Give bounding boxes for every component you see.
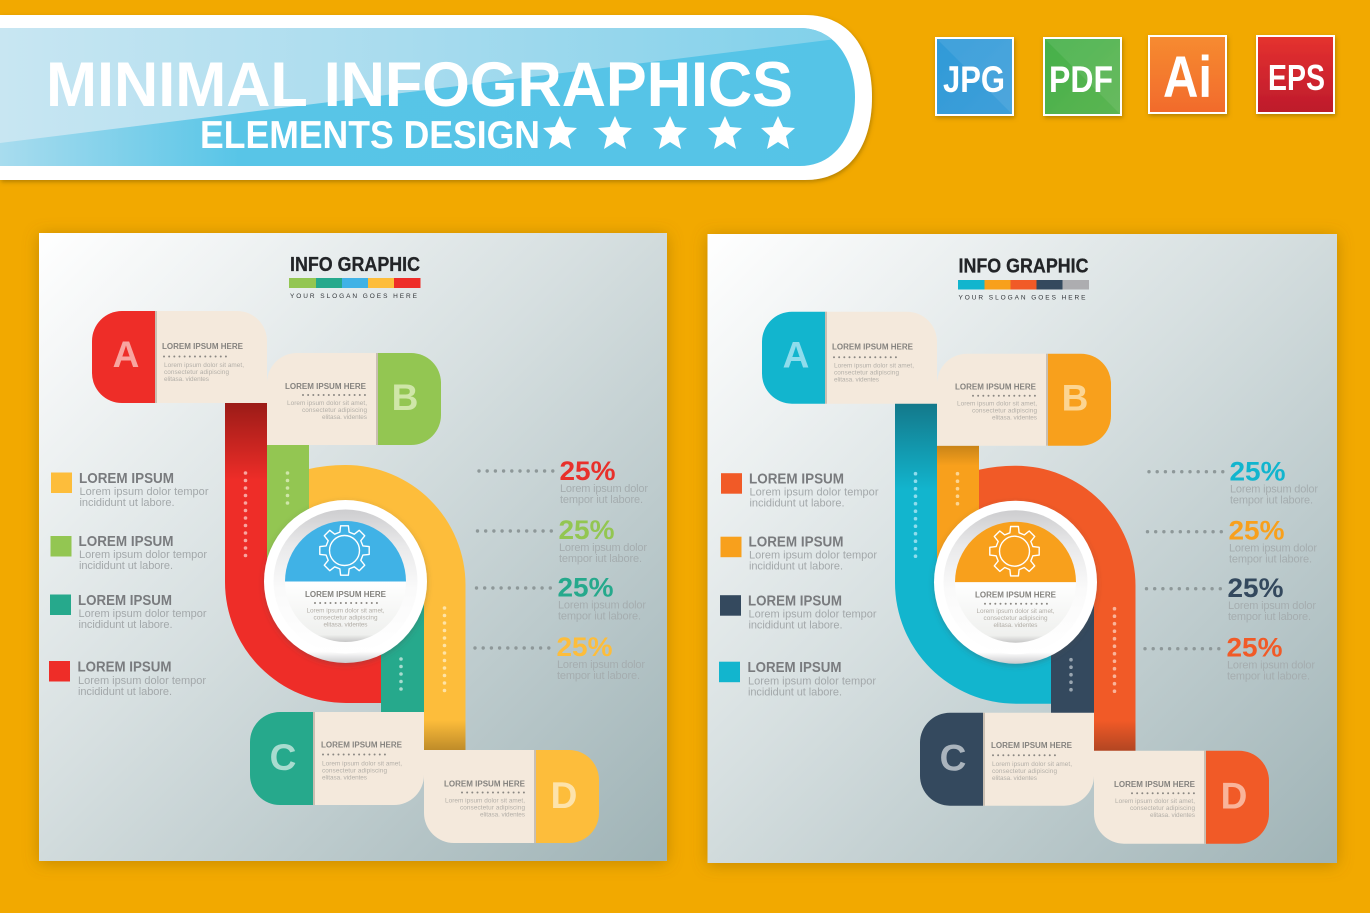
center circle: Lorem ipsum dolor sit amet, <box>306 608 385 614</box>
icon: PDF <box>1044 38 1121 115</box>
percent stats: tempor iut labore. <box>560 494 643 506</box>
percent stats: Lorem ipsum dolor <box>558 600 646 612</box>
band: green <box>267 445 309 575</box>
band: orange-red <box>979 466 1136 752</box>
percent stats: 25% <box>1228 573 1284 603</box>
center circle <box>934 501 1097 664</box>
card D: LOREM IPSUM HERE <box>1114 779 1195 789</box>
card B <box>937 354 1111 446</box>
card B: Lorem ipsum dolor sit amet, <box>287 400 367 407</box>
percent stats: 25% <box>1230 457 1286 487</box>
card C: consectetur adipiscing <box>322 768 387 774</box>
center circle: LOREM IPSUM HERE <box>305 589 386 599</box>
percent stats: tempor iut labore. <box>1227 671 1310 683</box>
percent stats: Lorem ipsum dolor <box>560 483 648 495</box>
icon: JPG: JPG <box>943 59 1005 100</box>
legend: LOREM IPSUM <box>78 658 172 676</box>
percent stats: 25% <box>556 632 612 662</box>
card C: LOREM IPSUM HERE <box>321 740 402 750</box>
legend: incididunt ut labore. <box>78 686 172 698</box>
heading <box>289 253 420 300</box>
icon: PDF: PDF <box>1049 59 1113 100</box>
heading: INFO GRAPHIC <box>290 253 420 276</box>
card C: C <box>940 738 966 779</box>
card D: consectetur adipiscing <box>1130 805 1195 812</box>
card D: Lorem ipsum dolor sit amet, <box>1115 798 1195 805</box>
card A: consectetur adipiscing <box>164 369 229 376</box>
card B: elitasa. videntes <box>992 415 1037 422</box>
percent stats: tempor iut labore. <box>1229 554 1312 566</box>
card C: elitasa. videntes <box>322 774 367 782</box>
card C <box>920 713 1094 806</box>
card B: consectetur adipiscing <box>302 407 367 414</box>
card C: consectetur adipiscing <box>992 768 1057 775</box>
legend: LOREM IPSUM <box>748 534 844 551</box>
legend: Lorem ipsum dolor tempor <box>749 550 877 562</box>
legend: LOREM IPSUM <box>79 470 174 487</box>
legend: Lorem ipsum dolor tempor <box>78 675 206 687</box>
card B: LOREM IPSUM HERE <box>285 381 366 391</box>
card A: elitasa. videntes <box>834 377 879 384</box>
card A <box>92 311 267 403</box>
card D: consectetur adipiscing <box>460 804 525 812</box>
percent stats: Lorem ipsum dolor <box>557 659 645 671</box>
icon: gear <box>320 526 369 575</box>
card B: LOREM IPSUM HERE <box>955 382 1036 392</box>
legend: Lorem ipsum dolor tempor <box>748 676 876 688</box>
card C <box>250 712 424 805</box>
percent stats: tempor iut labore. <box>558 610 641 622</box>
card D <box>1094 751 1269 844</box>
banner subtitle: ELEMENTS DESIGN <box>200 114 540 157</box>
icon: JPG <box>936 38 1013 115</box>
legend: Lorem ipsum dolor tempor <box>748 609 877 621</box>
legend: LOREM IPSUM <box>748 659 842 676</box>
percent stats: tempor iut labore. <box>557 670 640 682</box>
band dots <box>246 473 444 692</box>
card B: B <box>1062 378 1088 419</box>
card B: elitasa. videntes <box>322 414 367 421</box>
percent stats: tempor iut labore. <box>1230 495 1313 507</box>
center circle: consectetur adipiscing <box>314 614 378 622</box>
heading: YOUR SLOGAN GOES HERE <box>290 293 418 300</box>
percent stats <box>475 456 648 682</box>
percent stats: Lorem ipsum dolor <box>1227 660 1315 672</box>
legend <box>719 471 879 699</box>
band: cyan <box>895 403 1051 704</box>
center circle: Lorem ipsum dolor sit amet, <box>976 608 1055 615</box>
band: orange <box>937 446 979 576</box>
banner <box>0 15 872 180</box>
percent stats: tempor iut labore. <box>559 553 642 565</box>
band: navy <box>1051 601 1094 714</box>
legend: LOREM IPSUM <box>748 593 842 610</box>
legend: LOREM IPSUM <box>78 533 174 550</box>
card A: A <box>783 335 809 376</box>
card A: consectetur adipiscing <box>834 370 899 377</box>
heading: INFO GRAPHIC <box>958 254 1089 278</box>
card D: Lorem ipsum dolor sit amet, <box>445 798 525 804</box>
card D: elitasa. videntes <box>1150 812 1195 819</box>
percent stats: 25% <box>558 572 614 602</box>
heading: YOUR SLOGAN GOES HERE <box>958 294 1086 302</box>
card C: elitasa. videntes <box>992 775 1037 782</box>
percent stats: Lorem ipsum dolor <box>1230 484 1318 496</box>
percent stats: 25% <box>558 515 614 545</box>
card A <box>762 312 937 404</box>
heading <box>958 254 1089 302</box>
legend: Lorem ipsum dolor tempor <box>750 487 879 499</box>
band: teal <box>381 600 424 713</box>
percent stats: Lorem ipsum dolor <box>1229 543 1317 555</box>
card D: elitasa. videntes <box>480 812 525 818</box>
card B <box>267 353 441 445</box>
rating stars <box>543 116 795 149</box>
legend: incididunt ut labore. <box>78 619 172 631</box>
percent stats: 25% <box>560 456 616 486</box>
card A: elitasa. videntes <box>164 376 209 383</box>
card D <box>424 750 599 843</box>
legend: Lorem ipsum dolor tempor <box>79 549 207 561</box>
center circle <box>264 500 427 663</box>
banner title: MINIMAL INFOGRAPHICS <box>46 50 793 120</box>
legend: incididunt ut labore. <box>79 560 173 572</box>
percent stats: 25% <box>1228 516 1284 546</box>
legend: LOREM IPSUM <box>78 592 172 609</box>
percent stats <box>1145 457 1318 683</box>
card B: Lorem ipsum dolor sit amet, <box>957 401 1037 408</box>
icon: Ai: Ai <box>1163 45 1212 110</box>
card C: LOREM IPSUM HERE <box>991 740 1072 750</box>
percent stats: Lorem ipsum dolor <box>559 542 647 554</box>
band: red <box>225 402 381 703</box>
infographic body <box>719 312 1318 844</box>
icon: EPS <box>1257 36 1334 113</box>
percent stats: 25% <box>1226 633 1282 663</box>
card D: LOREM IPSUM HERE <box>444 778 525 788</box>
card C: Lorem ipsum dolor sit amet, <box>322 760 402 768</box>
card C: C <box>270 737 296 778</box>
card D: D <box>551 775 577 816</box>
legend: incididunt ut labore. <box>80 497 174 509</box>
legend: incididunt ut labore. <box>748 620 842 632</box>
legend: Lorem ipsum dolor tempor <box>78 608 207 620</box>
center circle: consectetur adipiscing <box>984 615 1048 622</box>
legend: incididunt ut labore. <box>750 498 844 510</box>
center circle: elitasa. videntes <box>994 622 1038 629</box>
legend: incididunt ut labore. <box>748 687 842 699</box>
legend: incididunt ut labore. <box>749 561 843 573</box>
card B: consectetur adipiscing <box>972 408 1037 415</box>
panel: left infographic <box>39 233 667 861</box>
card A: Lorem ipsum dolor sit amet, <box>164 362 244 369</box>
icon: Ai <box>1149 36 1226 113</box>
band dots <box>916 474 1114 693</box>
legend: Lorem ipsum dolor tempor <box>80 486 209 498</box>
card A: LOREM IPSUM HERE <box>832 342 913 352</box>
card A: LOREM IPSUM HERE <box>162 341 243 351</box>
percent stats: Lorem ipsum dolor <box>1228 600 1316 612</box>
icon: EPS: EPS <box>1268 57 1325 98</box>
center circle: LOREM IPSUM HERE <box>975 590 1056 600</box>
card D: D <box>1221 776 1247 817</box>
legend <box>49 470 209 698</box>
card B: B <box>392 377 418 418</box>
band: yellow <box>309 465 466 751</box>
center circle: elitasa. videntes <box>324 622 368 628</box>
card C: Lorem ipsum dolor sit amet, <box>992 761 1072 768</box>
legend: LOREM IPSUM <box>749 471 844 488</box>
card A: Lorem ipsum dolor sit amet, <box>834 363 914 370</box>
card A: A <box>113 334 139 375</box>
icon: gear <box>990 526 1039 576</box>
percent stats: tempor iut labore. <box>1228 611 1311 623</box>
panel: right infographic <box>708 234 1337 863</box>
